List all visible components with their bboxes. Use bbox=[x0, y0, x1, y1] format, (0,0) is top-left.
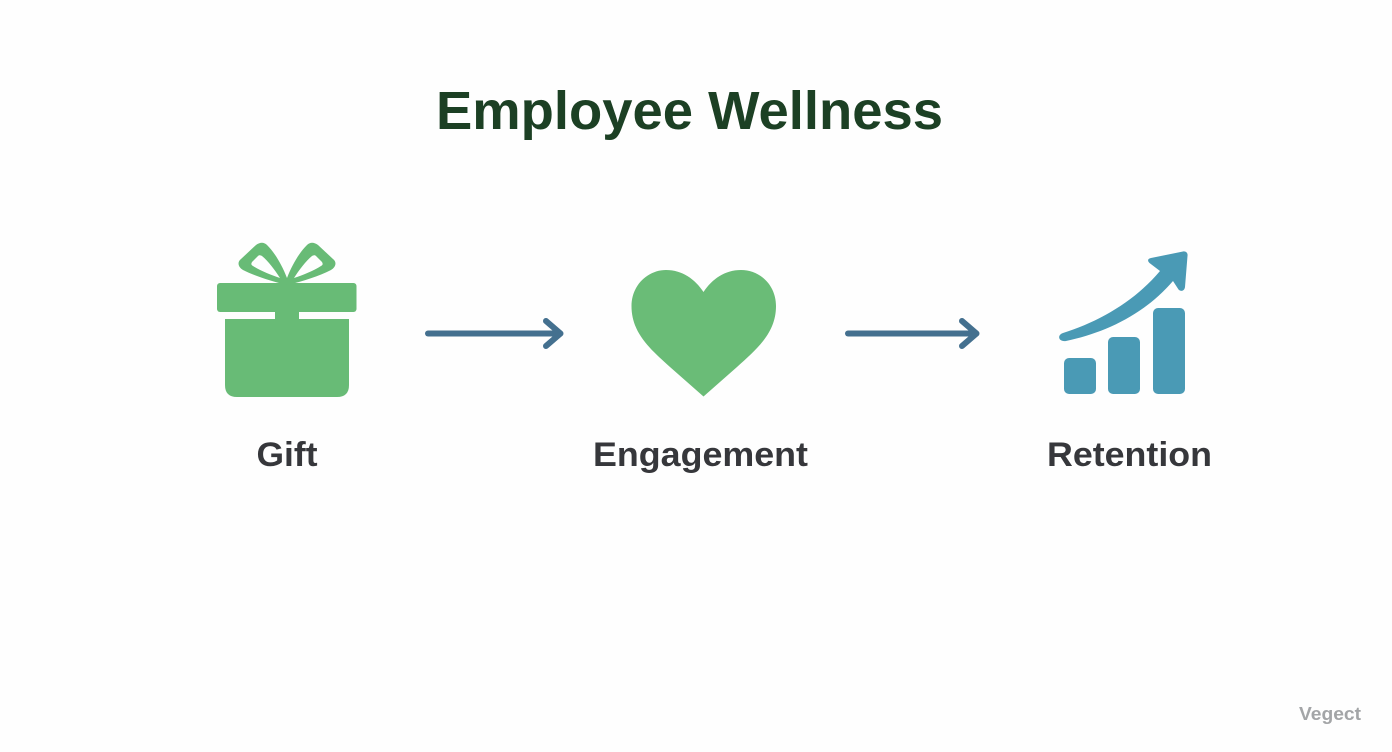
watermark: Vegect bbox=[1299, 704, 1361, 724]
label: Engagement: Engagement bbox=[593, 436, 808, 474]
arrow: engagement to retention bbox=[848, 321, 976, 346]
label: Gift: Gift bbox=[256, 436, 318, 474]
label: Retention: Retention bbox=[1047, 436, 1212, 474]
title: Employee Wellness bbox=[436, 81, 943, 141]
icon: gift box bbox=[217, 243, 356, 397]
icon: heart bbox=[632, 270, 776, 396]
icon: growth chart bbox=[1059, 251, 1188, 394]
arrow: gift to engagement bbox=[428, 321, 560, 346]
